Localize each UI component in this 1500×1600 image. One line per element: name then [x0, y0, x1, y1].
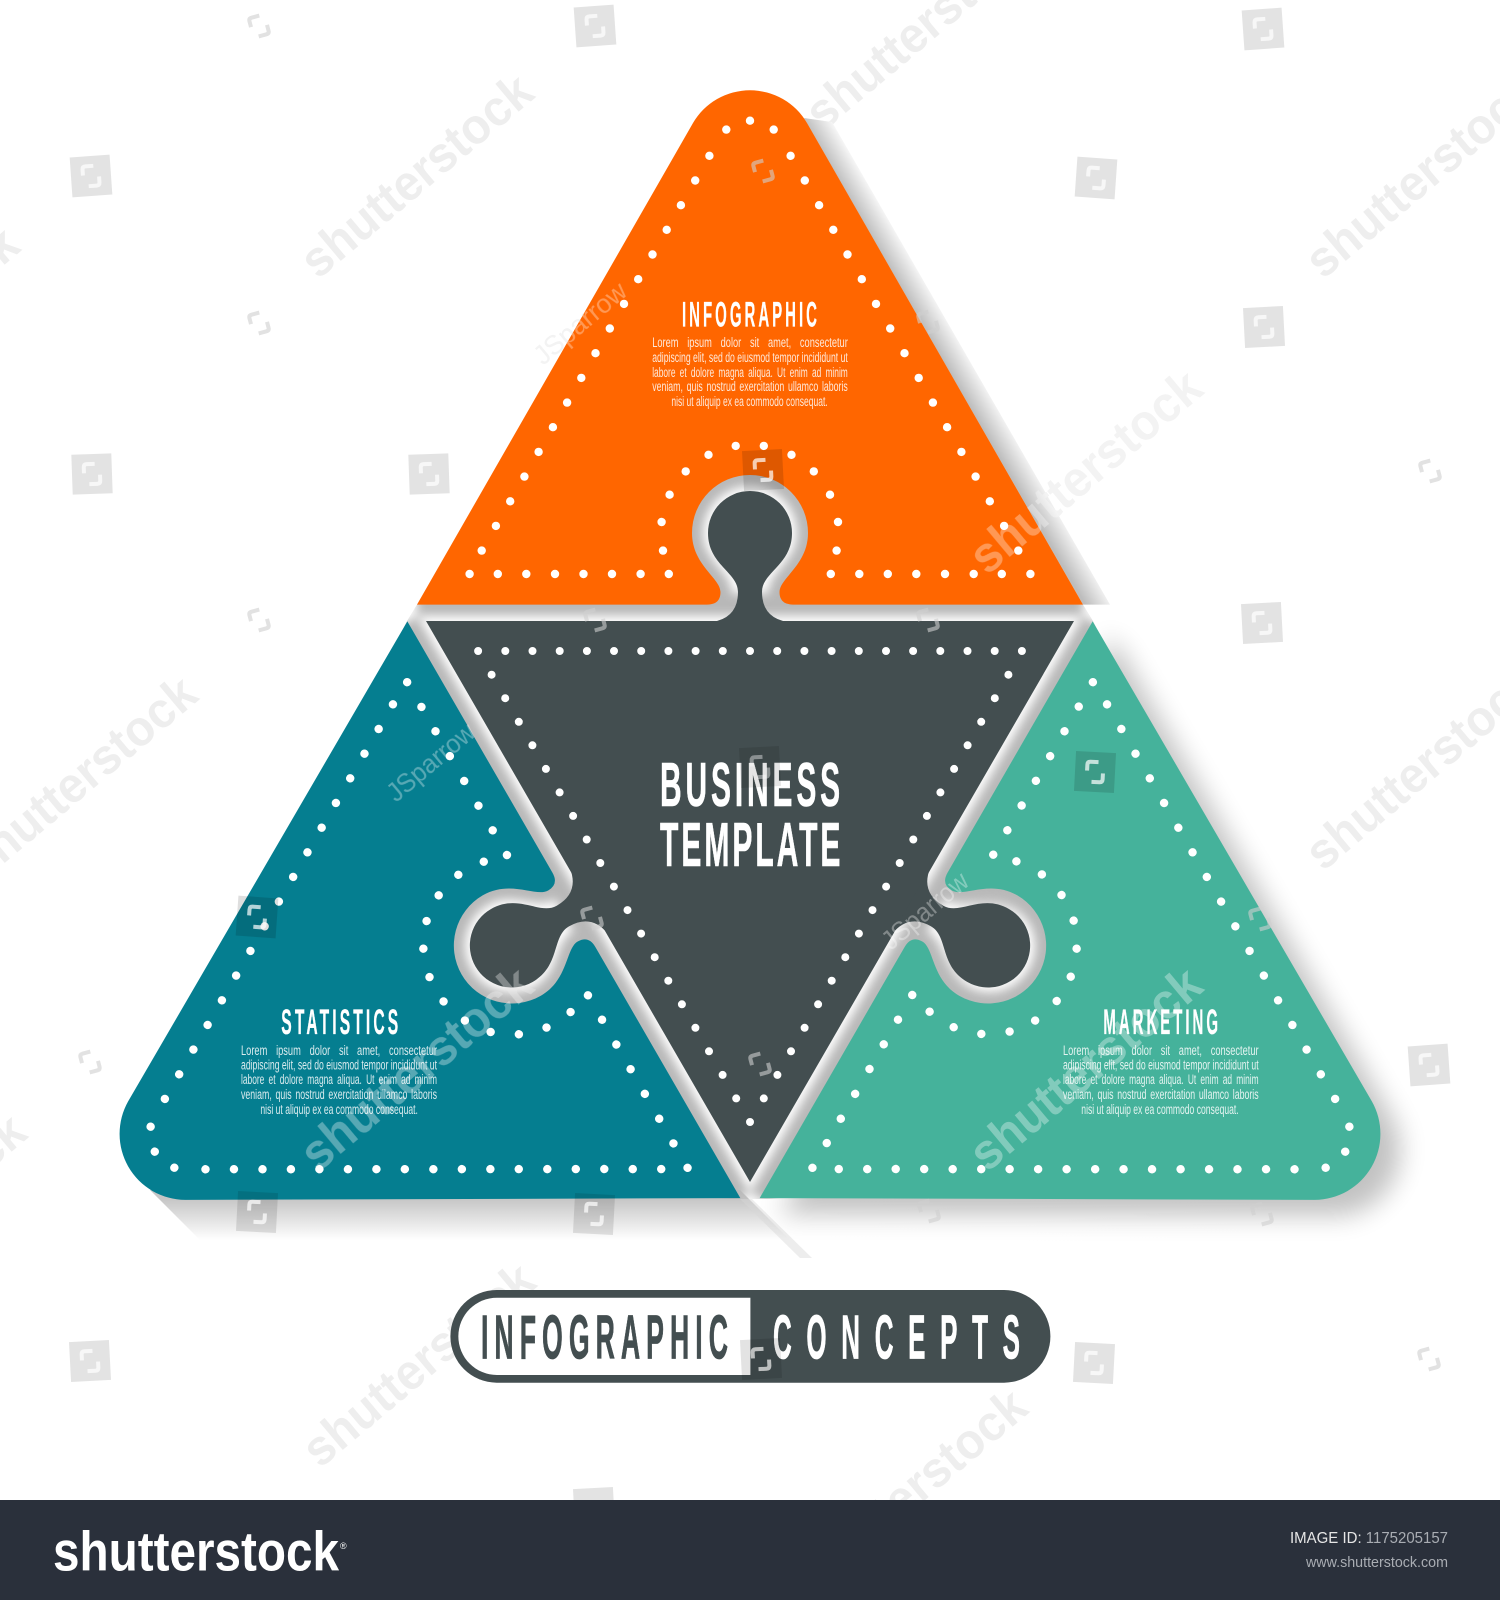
watermark text on white: JSparrow	[528, 275, 633, 371]
title: business template	[660, 751, 844, 880]
green puzzle shape	[760, 621, 1500, 1455]
puzzle tab: right	[890, 865, 1046, 1003]
text block: statistics: STATISTICS	[281, 1003, 401, 1042]
image id: IMAGE ID: 1175205157	[1290, 1530, 1448, 1547]
orange puzzle shape	[417, 90, 1083, 605]
banner pill	[450, 1290, 1050, 1383]
panel: central dark triangle	[426, 491, 1074, 1182]
website: www.shutterstock.com	[1305, 1555, 1448, 1571]
body copy: infographic: adipiscing elit, sed do eiusmod tempor incididunt ut	[652, 350, 848, 365]
banner: infographic concepts	[450, 1290, 1050, 1383]
dotted outline: centre	[478, 651, 1022, 1122]
panel: green piece	[760, 621, 1500, 1455]
watermark text on white: shutterstock	[958, 358, 1213, 584]
text: BUSINESS	[660, 751, 844, 820]
watermark text over pieces: JSparrow	[381, 716, 481, 808]
dotted outline: green	[812, 682, 1485, 1394]
watermark text on white: shutterstock	[783, 1377, 1038, 1600]
dotted outline: teal	[15, 682, 688, 1394]
dark triangle body	[426, 621, 1074, 1182]
body copy: marketing: adipiscing elit, sed do eiusmod tempor incididunt ut	[1063, 1058, 1259, 1072]
text block: marketing	[1063, 1003, 1259, 1117]
body copy: statistics: adipiscing elit, sed do eiusmod tempor incididunt ut	[241, 1058, 437, 1072]
watermark text over pieces: shutterstock	[958, 955, 1213, 1181]
watermark text over pieces	[289, 275, 1213, 1181]
text: TEMPLATE	[660, 811, 843, 880]
body copy: marketing: nisi ut aliquip ex ea commodo consequat.	[1081, 1102, 1239, 1117]
footer background	[0, 1500, 1500, 1600]
banner white half	[458, 1298, 750, 1375]
body copy: infographic	[652, 335, 848, 409]
body copy: marketing: labore et dolore magna aliqua. Ut enim ad minim	[1063, 1072, 1259, 1087]
watermark brackets	[80, 14, 1440, 1371]
watermark text over pieces: JSparrow	[876, 865, 975, 956]
body copy: marketing: Lorem ipsum dolor sit amet, consectetur	[1063, 1043, 1259, 1058]
dotted outline: orange	[470, 121, 1030, 574]
puzzle tab: top	[708, 491, 792, 622]
outer drop shadows	[150, 118, 1500, 1471]
panel: teal piece	[0, 621, 740, 1455]
body copy: statistics: labore et dolore magna aliqua. Ut enim ad minim	[241, 1072, 437, 1087]
body copy: infographic: labore et dolore magna aliqua. Ut enim ad minim	[652, 365, 848, 380]
body copy: statistics: Lorem ipsum dolor sit amet, consectetur	[241, 1043, 437, 1058]
registered mark: ®	[340, 1541, 347, 1551]
body copy: marketing: veniam, quis nostrud exercitation ullamco laboris	[1063, 1087, 1259, 1102]
panel: orange piece	[417, 90, 1083, 605]
text: CONCEPTS	[773, 1303, 1035, 1372]
text block: infographic	[652, 295, 848, 409]
watermark text over pieces: shutterstock	[289, 955, 544, 1181]
watermark text on white: shutterstock	[289, 955, 544, 1181]
body copy: statistics: veniam, quis nostrud exercitation ullamco laboris	[241, 1087, 437, 1102]
watermark text on white: shutterstock	[291, 1251, 546, 1477]
body copy: marketing	[1063, 1043, 1259, 1117]
body copy: infographic: Lorem ipsum dolor sit amet, consectetur	[652, 335, 848, 350]
body copy: infographic: veniam, quis nostrud exercitation ullamco laboris	[652, 379, 848, 394]
text block: marketing: MARKETING	[1103, 1003, 1221, 1042]
body copy: statistics: nisi ut aliquip ex ea commodo consequat.	[260, 1102, 418, 1117]
teal puzzle shape	[0, 621, 740, 1455]
text block: statistics	[241, 1003, 437, 1117]
watermark text over pieces: JSparrow	[528, 275, 633, 371]
puzzle tab: left	[454, 865, 610, 1003]
body copy: infographic: nisi ut aliquip ex ea commodo consequat.	[671, 394, 828, 409]
banner: infographic concepts: INFOGRAPHIC	[481, 1303, 734, 1372]
text block: infographic: INFOGRAPHIC	[682, 295, 820, 334]
watermark text on white: shutterstock	[289, 62, 544, 288]
shutterstock logo: shutterstock	[53, 1520, 340, 1583]
footer bar	[0, 1500, 1500, 1600]
gap shading between pieces	[404, 475, 1096, 1199]
watermark text over pieces: shutterstock	[958, 358, 1213, 584]
body copy: statistics	[241, 1043, 437, 1117]
